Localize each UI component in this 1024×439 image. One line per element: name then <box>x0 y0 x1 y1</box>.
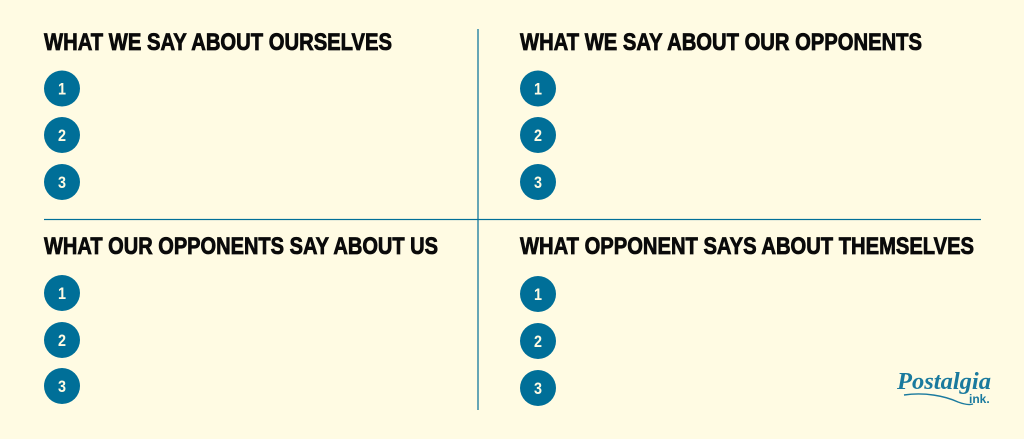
panel: what we say about our opponents <box>520 29 922 200</box>
heading: ourselves: WHAT WE SAY ABOUT OURSELVES <box>44 29 392 56</box>
number badge 3 <box>44 164 80 200</box>
number badge 1 <box>44 70 80 106</box>
number badge 3 <box>520 370 556 406</box>
panel: what opponent says about themselves <box>520 233 974 406</box>
number badge 1 <box>520 276 556 312</box>
number badge 3 <box>520 164 556 200</box>
logo: Postalgia ink: ink. <box>969 392 990 406</box>
number badge 1: 1 <box>534 80 542 98</box>
number badge 2: 2 <box>58 126 66 145</box>
number badge 2: 2 <box>534 126 542 145</box>
number badge 3: 3 <box>58 173 66 192</box>
logo: Postalgia ink: Postalgia <box>896 369 991 395</box>
panel: what our opponents say about us <box>44 233 438 404</box>
number badge 3: 3 <box>534 173 542 192</box>
number badge 2 <box>520 117 556 153</box>
number badge 1 <box>520 70 556 106</box>
heading: about us: WHAT OUR OPPONENTS SAY ABOUT US <box>44 233 438 260</box>
heading: our opponents: WHAT WE SAY ABOUT OUR OPPONENTS <box>520 29 922 56</box>
number badge 3: 3 <box>534 379 542 398</box>
number badge 2 <box>44 117 80 153</box>
number badge 2: 2 <box>534 332 542 351</box>
number badge 2 <box>520 323 556 359</box>
number badge 1 <box>44 275 80 311</box>
logo: Postalgia ink <box>896 369 991 406</box>
number badge 2 <box>44 322 80 358</box>
number badge 3 <box>44 368 80 404</box>
number badge 3: 3 <box>58 377 66 396</box>
number badge 1: 1 <box>534 285 542 304</box>
panel: what we say about ourselves <box>44 29 392 200</box>
number badge 1: 1 <box>58 80 66 98</box>
number badge 2: 2 <box>58 331 66 350</box>
number badge 1: 1 <box>58 284 66 303</box>
